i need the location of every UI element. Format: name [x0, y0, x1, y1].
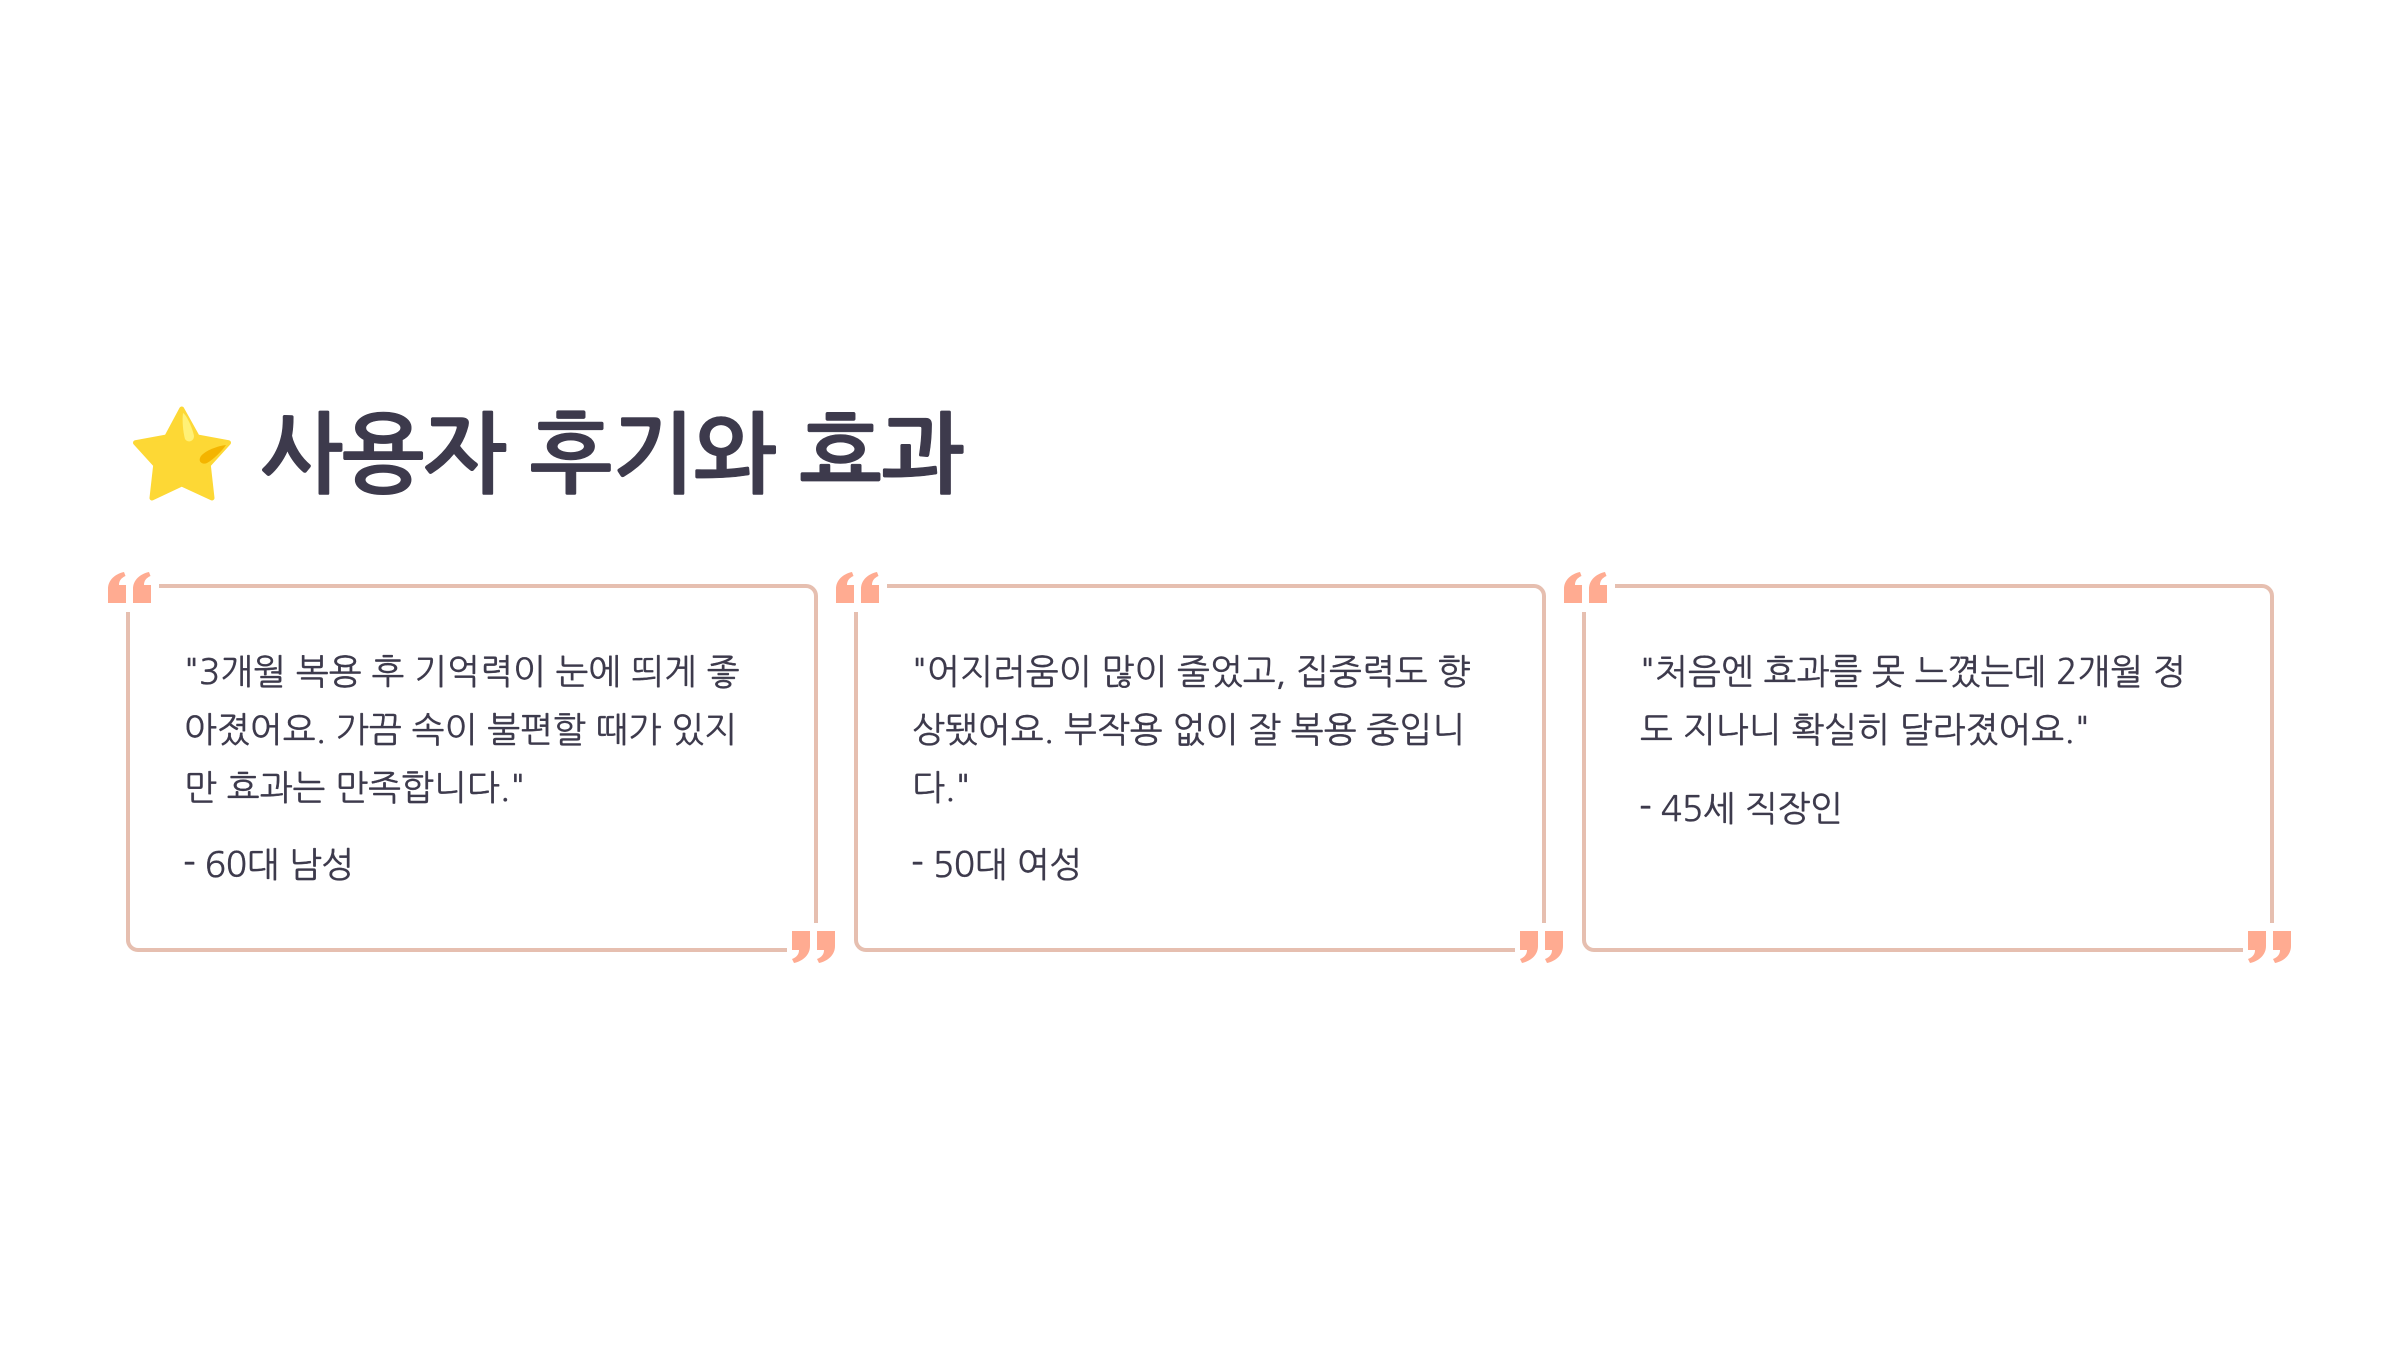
reviewer: - 60대 남성: [183, 848, 354, 883]
panel: review 3: [1582, 584, 2274, 952]
icon: closing quote: [787, 923, 835, 963]
review text: "어지러움이 많이 줄었고, 집중력도 향: [912, 655, 1470, 690]
review text: [184, 654, 740, 806]
icon: opening quote: [108, 572, 159, 612]
review text: [912, 654, 1470, 806]
icon: star: [133, 406, 231, 500]
review text: "3개월 복용 후 기억력이 눈에 띄게 좋: [184, 655, 740, 690]
icon: closing quote: [2243, 923, 2291, 963]
reviewer: - 45세 직장인: [1639, 792, 1843, 827]
icon: closing quote: [1515, 923, 1563, 963]
review text: 도 지나니 확실히 달라졌어요.": [1640, 713, 2090, 748]
title: 사용자 후기와 효과: [260, 412, 963, 499]
icon: opening quote: [1564, 572, 1615, 612]
icon: opening quote: [836, 572, 887, 612]
review text: "처음엔 효과를 못 느꼈는데 2개월 정: [1640, 655, 2186, 690]
review text: 아졌어요. 가끔 속이 불편할 때가 있지: [184, 713, 737, 748]
panel: review 2: [854, 584, 1546, 952]
review text: 다.": [912, 771, 971, 806]
review text: 만 효과는 만족합니다.": [184, 771, 525, 806]
reviewer: - 50대 여성: [911, 848, 1082, 883]
review text: [1640, 654, 2186, 748]
panel: review 1: [126, 584, 818, 952]
review text: 상됐어요. 부작용 없이 잘 복용 중입니: [912, 713, 1465, 748]
